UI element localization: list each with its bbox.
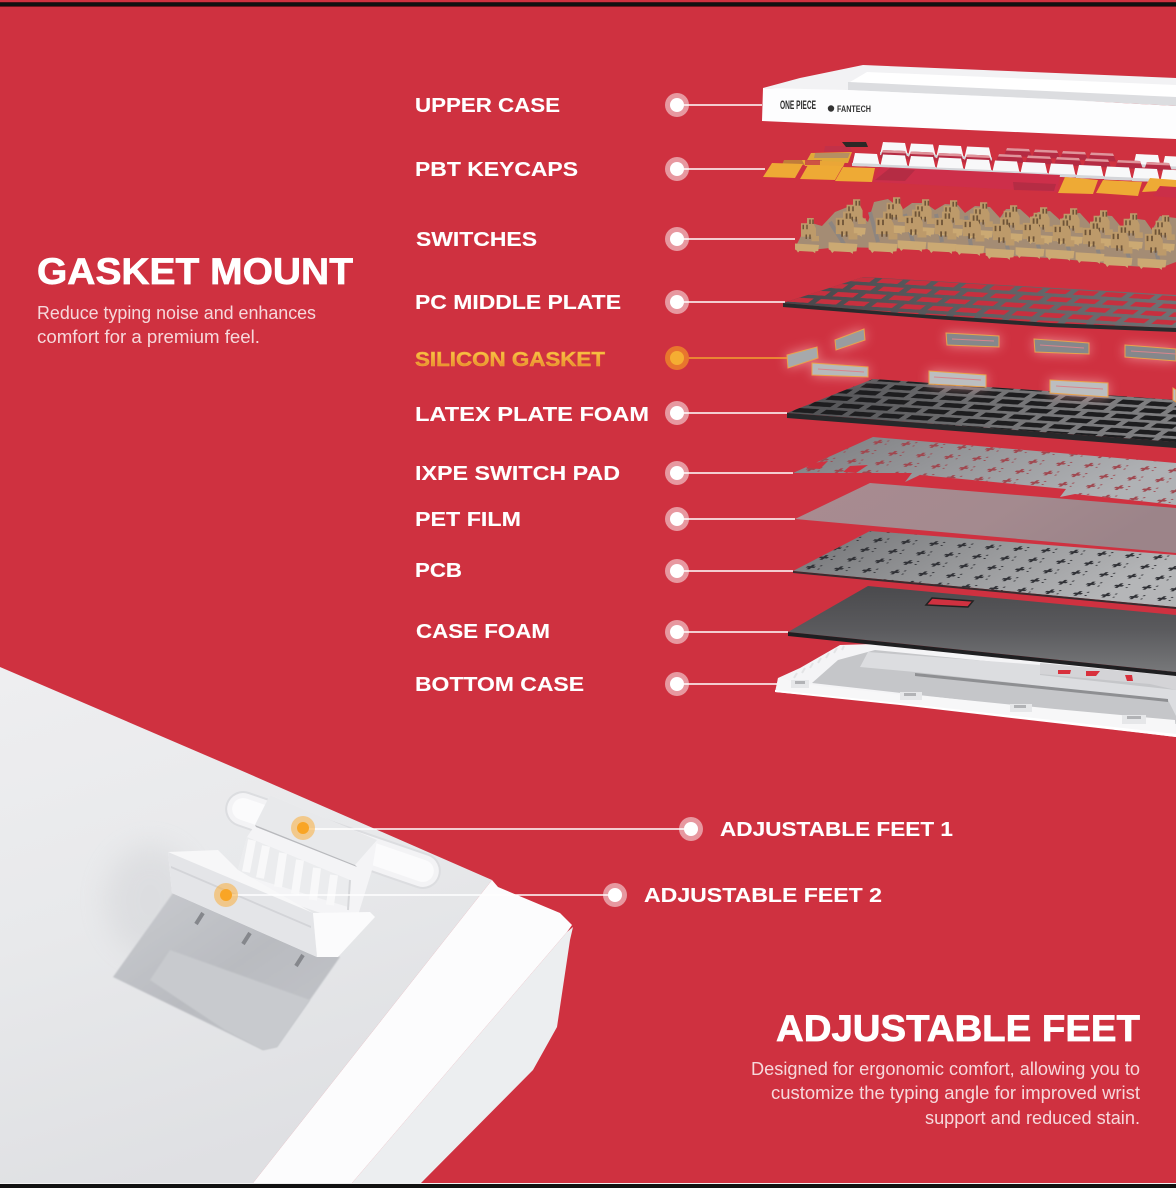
callout: PET film: PET FILM: [415, 509, 521, 531]
layer: PET film: [795, 483, 1176, 553]
callout: IXPE switch pad: [415, 461, 793, 485]
callout: PCB: PCB: [415, 560, 462, 582]
foot cavity: [113, 893, 340, 1050]
callout: IXPE switch pad: IXPE SWITCH PAD: [415, 463, 620, 485]
callout: bottom case: [415, 672, 777, 696]
layer: PC middle plate: [783, 277, 1176, 332]
callout: bottom case: BOTTOM CASE: [415, 674, 584, 696]
panel: keyboard corner with feet: [0, 667, 573, 1183]
text: adjustable feet description: Designed for ergonomic comfort, allowing you to: [751, 1059, 1140, 1079]
callout: switches: SWITCHES: [416, 229, 537, 251]
callout: adjustable feet 2: ADJUSTABLE FEET 2: [644, 885, 882, 907]
callout: PC middle plate: PC MIDDLE PLATE: [415, 292, 621, 314]
callout: upper case: [415, 93, 762, 117]
layer: IXPE switch pad: [790, 435, 1176, 507]
layer: upper case: [762, 65, 1176, 139]
text: adjustable feet description: customize the typing angle for improved wrist: [771, 1083, 1140, 1103]
logo: One Piece: ONE PIECE: [780, 98, 816, 112]
layer: bottom case: [775, 644, 1176, 737]
logo: Fantech: [828, 104, 871, 114]
keyboard chamfer: [253, 880, 572, 1183]
layer: PCB: [793, 531, 1176, 609]
heading: adjustable feet: ADJUSTABLE FEET: [776, 1008, 1140, 1049]
foot 1: [237, 795, 377, 925]
callout: PC middle plate: [415, 290, 785, 314]
text: adjustable feet description: support and reduced stain.: [925, 1108, 1140, 1128]
layer: switches: [795, 197, 1176, 270]
bottom border strip: [0, 1183, 1176, 1188]
text: gasket mount description: comfort for a premium feel.: [37, 327, 260, 347]
panel: exploded keyboard layers: [762, 65, 1176, 737]
callout: silicon gasket: [415, 346, 787, 371]
keyboard top surface: [0, 667, 492, 1183]
callout: PCB: [415, 559, 793, 583]
callout: case foam: [416, 620, 788, 644]
callout: adjustable feet 2: [214, 883, 882, 907]
layer: PBT keycaps: [763, 142, 1176, 198]
callout: latex plate foam: LATEX PLATE FOAM: [415, 404, 649, 426]
callout: PBT keycaps: PBT KEYCAPS: [415, 159, 578, 181]
logo: Fantech: FANTECH: [837, 104, 871, 114]
keyboard side: [352, 927, 573, 1183]
foot 2: [168, 850, 375, 957]
text: gasket mount description: [37, 303, 316, 347]
layer: case foam: [788, 586, 1176, 676]
heading: gasket mount: GASKET MOUNT: [37, 251, 353, 292]
text: adjustable feet description: [751, 1059, 1140, 1128]
callout: switches: [416, 227, 795, 251]
callout: PET film: [415, 507, 795, 531]
callout: upper case: UPPER CASE: [415, 95, 560, 117]
callout: adjustable feet 1: [291, 816, 953, 841]
callout: PBT keycaps: [415, 157, 765, 181]
text: gasket mount description: Reduce typing noise and enhances: [37, 303, 316, 323]
slot: [222, 787, 444, 893]
hinge pins: [196, 913, 303, 966]
callout: silicon gasket: SILICON GASKET: [415, 349, 605, 371]
layer: latex plate foam: [787, 379, 1176, 448]
callout: case foam: CASE FOAM: [416, 621, 550, 643]
callout: latex plate foam: [415, 401, 787, 426]
callout: adjustable feet 1: ADJUSTABLE FEET 1: [720, 819, 953, 841]
cavity lower ramp: [150, 950, 310, 1050]
soft shadow: [105, 845, 195, 955]
layer: silicon gasket pieces: [787, 329, 1176, 402]
top border strip: [0, 2, 1176, 7]
